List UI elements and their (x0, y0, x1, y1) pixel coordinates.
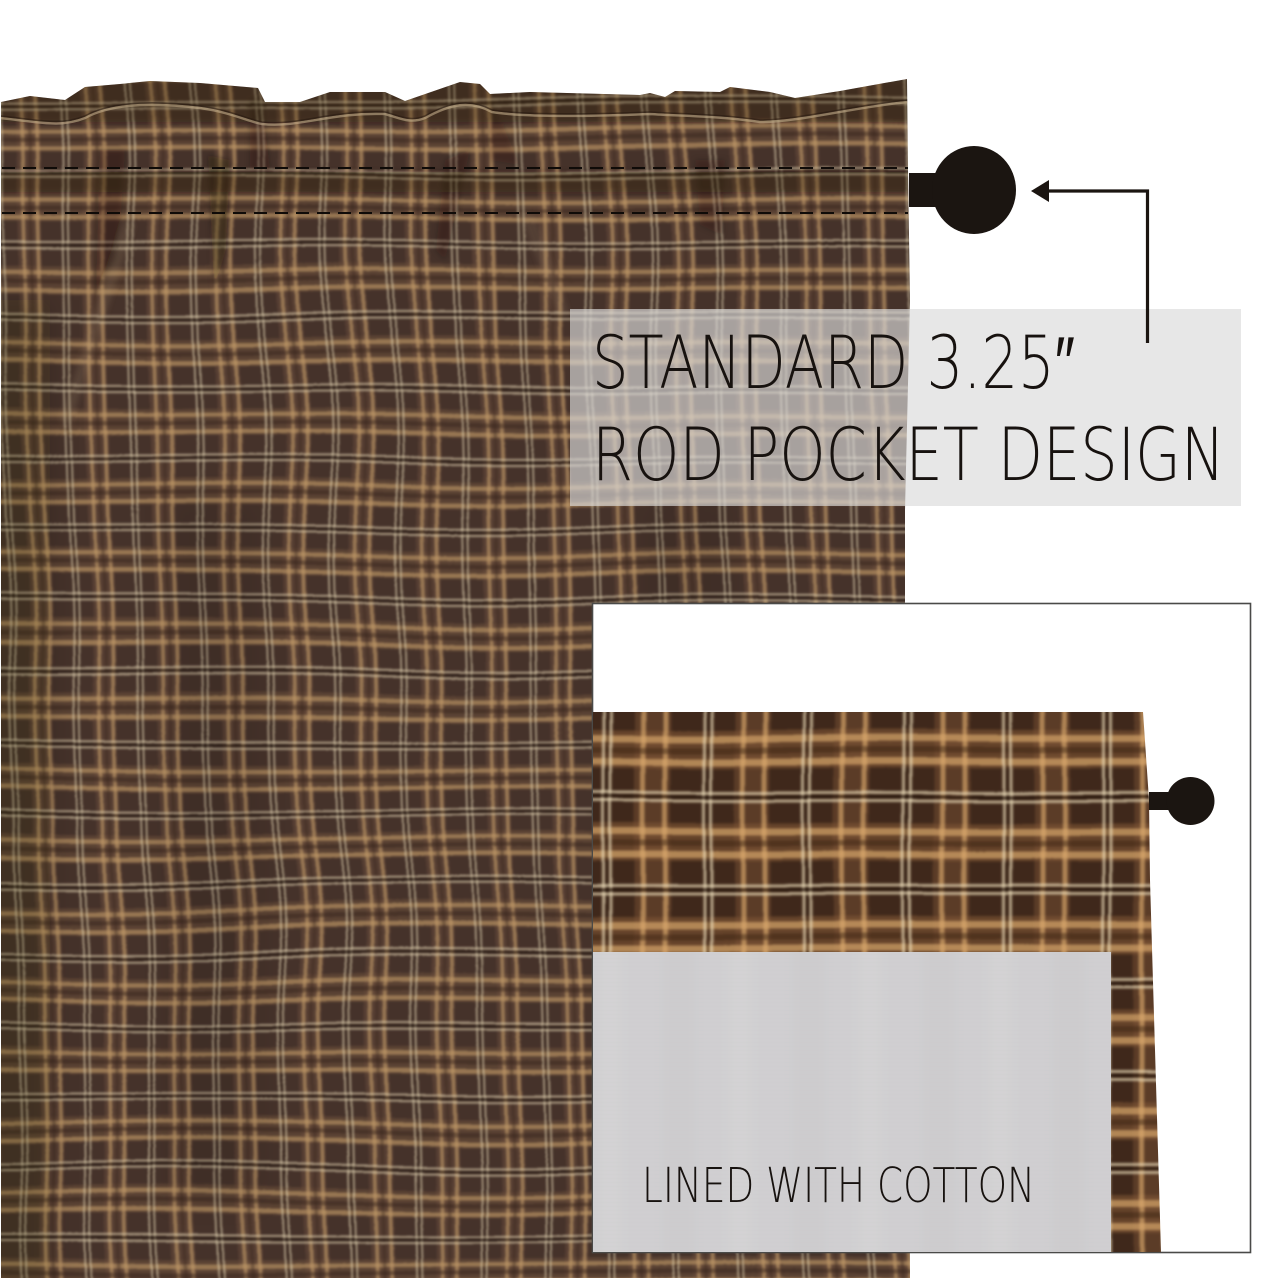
gathered rod pocket folds (0, 80, 908, 425)
curtain fabric (0, 50, 950, 1280)
main plaid curtain (0, 50, 950, 1280)
callout text (592, 321, 1225, 498)
icon: curtain rod with round finial (909, 146, 1016, 234)
icon: inset rod with round finial (1149, 777, 1214, 825)
rod pocket stitching, lower line (2, 212, 908, 214)
inset curtain fabric (593, 712, 1161, 1252)
broad fabric shading (0, 300, 730, 1280)
callout translucent panel (570, 309, 1241, 506)
lining swatch (593, 952, 1111, 1252)
callout: rod pocket label (570, 309, 1241, 506)
gathered wavy stripes (0, 102, 908, 125)
arrow pointing at the rod (1031, 180, 1148, 343)
inset frame (592, 604, 1250, 1252)
panel: lining detail inset (570, 604, 1250, 1280)
rod pocket stitching, upper line (2, 167, 908, 169)
lining label: LINED WITH COTTON (642, 1158, 1035, 1214)
callout text: STANDARD 3.25″ (592, 321, 1075, 406)
